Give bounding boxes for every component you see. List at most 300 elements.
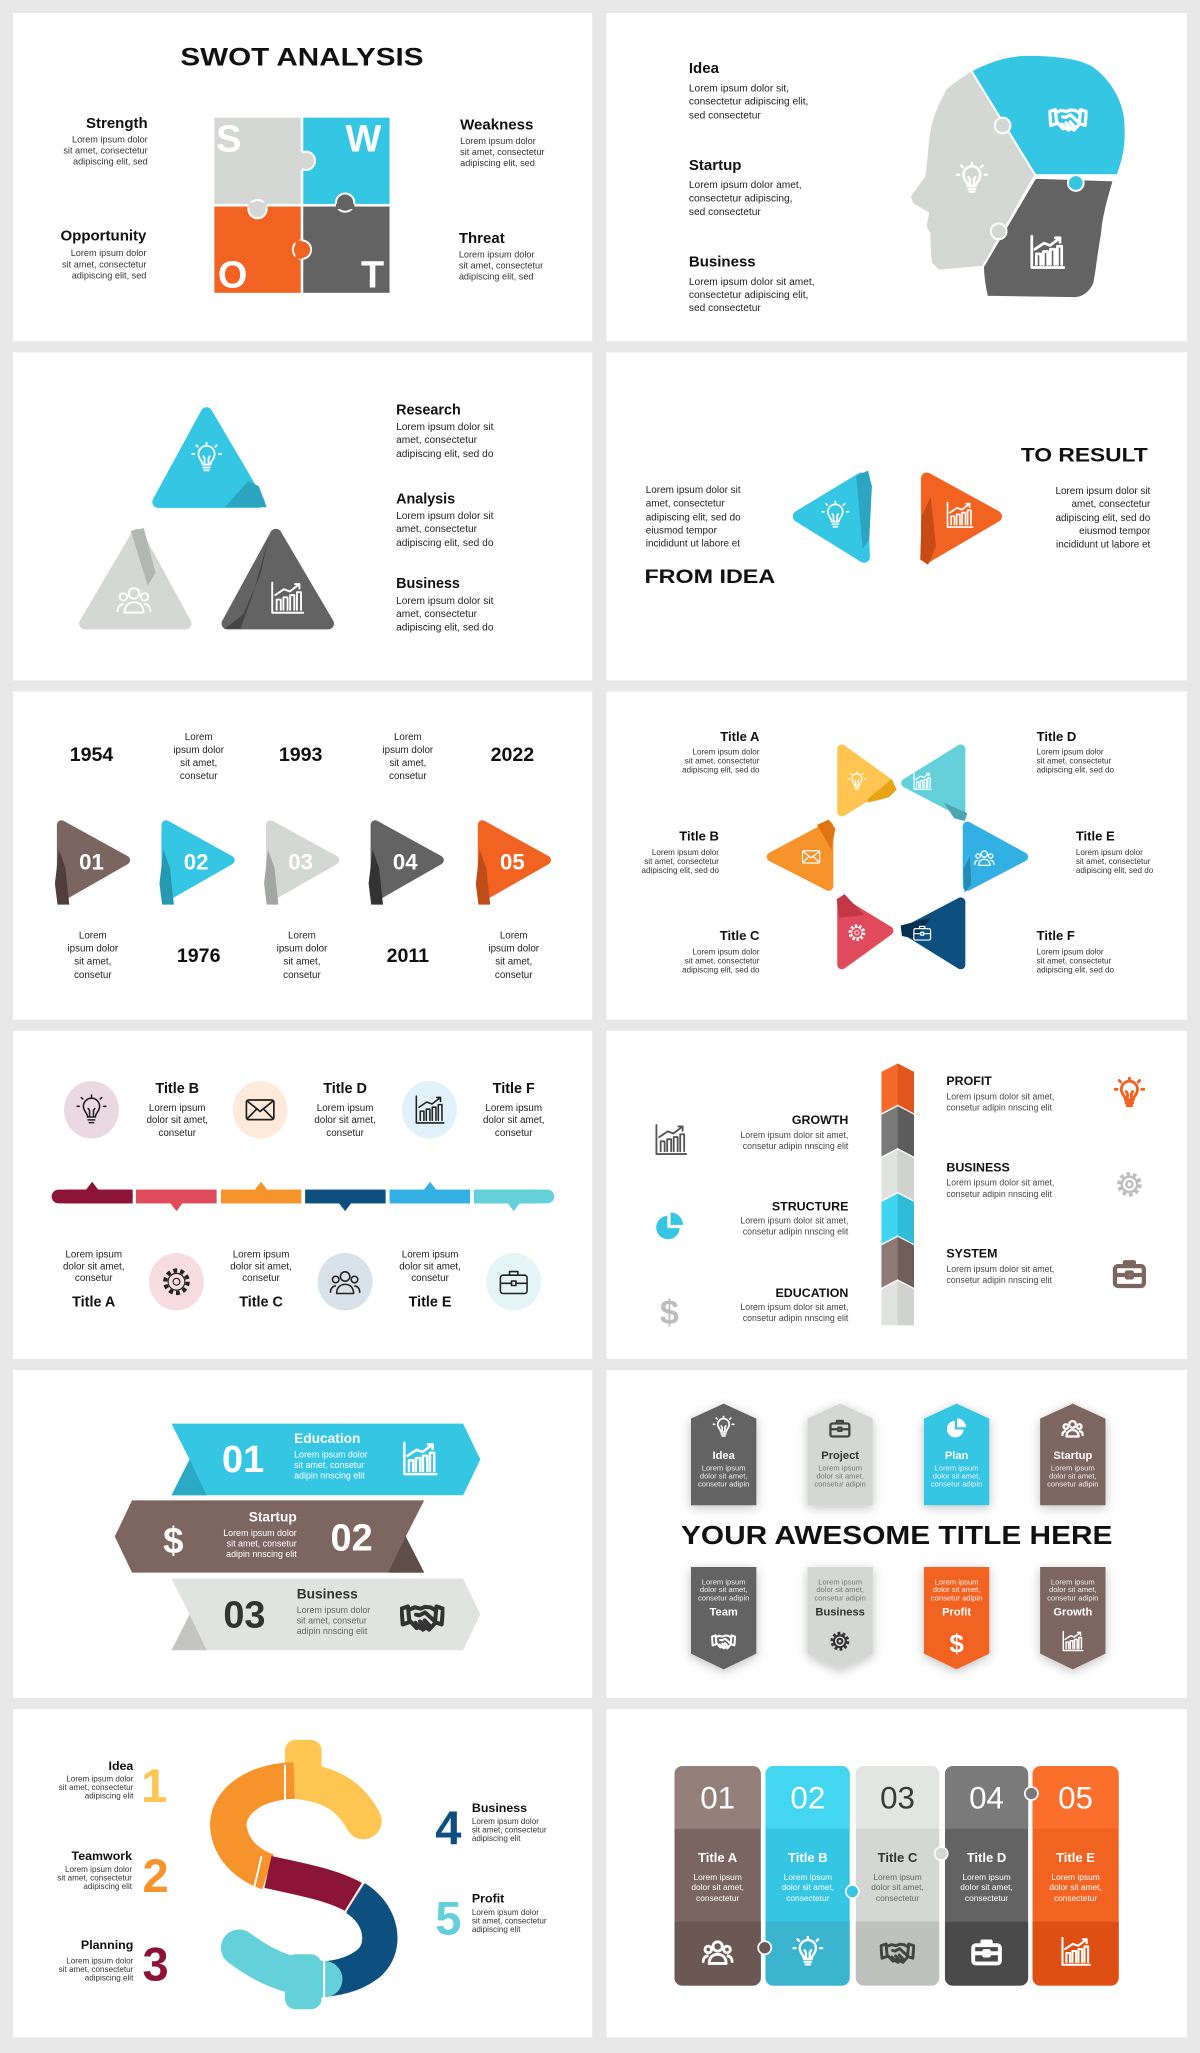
icon circles bottom xyxy=(149,1253,541,1310)
column D xyxy=(945,1766,1028,1986)
text: bottom lorem: sit amet, xyxy=(495,957,532,968)
text: years top xyxy=(70,744,534,766)
banner: Startup: Startup xyxy=(1053,1450,1092,1462)
text: 1 Idea: 1 xyxy=(141,1759,167,1812)
ribbon 01 Education: adipin nnscing elit xyxy=(294,1470,365,1480)
text: 2 Teamwork: Lorem ipsum dolor xyxy=(65,1865,132,1874)
text: 3 Planning: Lorem ipsum dolor xyxy=(66,1956,134,1965)
banner: Business: consetur adipin xyxy=(814,1594,866,1603)
text: top lorem: Lorem xyxy=(185,732,213,743)
text: bottom lorem: sit amet, xyxy=(74,957,111,968)
text: bottom titles: Lorem ipsum xyxy=(402,1250,458,1261)
column E: dolor sit amet, xyxy=(1049,1882,1102,1892)
text: 3 Planning: Planning xyxy=(81,1938,133,1952)
text: Title C xyxy=(682,928,760,975)
text: Title A: sit amet, consectetur xyxy=(685,756,760,765)
text: Idea xyxy=(689,60,808,121)
column B: Lorem ipsum xyxy=(784,1872,832,1882)
column D: consectetur xyxy=(965,1893,1008,1903)
banner: Growth: dolor sit amet, xyxy=(1049,1585,1097,1594)
banner: Growth xyxy=(1040,1567,1105,1669)
banner: Plan: dolor sit amet, xyxy=(933,1471,980,1480)
text: 4 Business: Business xyxy=(472,1801,527,1815)
text: Title C: adipiscing elit, sed do xyxy=(682,966,760,975)
text: 3 Planning xyxy=(59,1937,169,1990)
text: 1 Idea: Lorem ipsum dolor xyxy=(66,1775,134,1784)
shape: triangle A yellow xyxy=(842,749,897,812)
text: 2 Teamwork: 2 xyxy=(142,1849,169,1902)
text: right body: incididunt ut labore et xyxy=(1056,540,1151,551)
text: bottom titles: dolor sit amet, xyxy=(63,1261,124,1272)
text: top lorem: ipsum dolor xyxy=(173,745,225,756)
text: Startup: Lorem ipsum dolor amet, xyxy=(689,180,802,191)
text: top lorem xyxy=(173,732,434,782)
text: Weakness: Lorem ipsum dolor xyxy=(460,136,536,146)
banner: Team xyxy=(691,1567,756,1669)
text: right body: amet, consectetur xyxy=(1071,499,1151,510)
ribbon 01 Education: Education xyxy=(294,1431,360,1446)
text: Analysis: amet, consectetur xyxy=(396,524,478,535)
text: Business xyxy=(689,254,815,314)
banner: Growth: consetur adipin xyxy=(1047,1594,1099,1603)
shape: triangle B orange xyxy=(771,820,835,886)
banner: Profit xyxy=(924,1567,989,1669)
shape: triangle 04: 04 xyxy=(393,849,418,874)
text: top lorem: consetur xyxy=(389,771,427,782)
puzzle: SWOT squares: W xyxy=(346,119,382,161)
shape: triangle D teal xyxy=(906,749,967,821)
ribbon 01 Education: sit amet, consetur xyxy=(294,1460,364,1470)
text: top titles: Lorem ipsum xyxy=(149,1103,206,1114)
text: Analysis xyxy=(396,491,494,549)
column B: consectetur xyxy=(786,1893,830,1903)
text: Title B: Lorem ipsum dolor xyxy=(652,848,719,857)
ribbon 01 Education: 01 xyxy=(222,1439,264,1481)
column B: dolor sit amet, xyxy=(782,1882,834,1892)
text: bottom lorem: consetur xyxy=(283,970,321,981)
text: Startup: sed consectetur xyxy=(689,207,761,218)
text: 1 Idea xyxy=(59,1759,167,1812)
puzzle: SWOT squares: T xyxy=(361,255,384,297)
text: bottom titles xyxy=(63,1250,461,1311)
banner: Profit: consetur adipin xyxy=(931,1594,982,1603)
text: top lorem: Lorem xyxy=(394,732,422,743)
column C: dolor sit amet, xyxy=(871,1882,924,1892)
text: Idea: Idea xyxy=(689,60,720,77)
column C: 03 xyxy=(880,1781,915,1816)
text: right labels: consetur adipin nnscing elit xyxy=(946,1189,1053,1199)
banner: Team: Team xyxy=(710,1607,738,1619)
text: right labels: consetur adipin nnscing elit xyxy=(946,1275,1053,1285)
text: bottom titles: Title C xyxy=(239,1295,283,1311)
text: top titles xyxy=(146,1081,544,1139)
text: Startup xyxy=(689,157,802,218)
text: Title D: Lorem ipsum dolor xyxy=(1037,747,1104,756)
text: Weakness: sit amet, consectetur xyxy=(460,147,544,157)
text: Title F: adipiscing elit, sed do xyxy=(1037,966,1114,975)
text: 5 Profit: Profit xyxy=(472,1892,504,1906)
bar: colored segments xyxy=(52,1182,554,1211)
text: Research: adipiscing elit, sed do xyxy=(396,449,494,460)
title: SWOT ANALYSIS: SWOT ANALYSIS xyxy=(180,44,424,71)
ribbon 02 Startup: $ xyxy=(163,1520,184,1561)
text: years top: 1993 xyxy=(279,744,323,766)
puzzle knobs xyxy=(758,1787,1038,1954)
text: years top: 2022 xyxy=(491,744,534,766)
column A: Title A xyxy=(698,1850,738,1865)
text: Strength: adipiscing elit, sed xyxy=(73,157,148,167)
text: top titles: dolor sit amet, xyxy=(314,1115,376,1126)
icons: right xyxy=(1115,1078,1144,1286)
text: Business: Business xyxy=(396,576,460,592)
banner: Business: Business xyxy=(815,1607,865,1619)
text: Title C: Title C xyxy=(720,928,760,943)
panel: dollar puzzle xyxy=(13,1709,592,2037)
ribbon 03 Business: sit amet, consetur xyxy=(297,1616,367,1626)
text: Title F: Lorem ipsum dolor xyxy=(1037,947,1104,956)
banner: Startup: Lorem ipsum xyxy=(1051,1464,1095,1473)
text: Title A xyxy=(682,729,760,775)
text: Threat: sit amet, consectetur xyxy=(459,261,543,271)
text: left labels: Lorem ipsum dolor sit amet, xyxy=(740,1216,848,1226)
text: 5 Profit: 5 xyxy=(435,1892,461,1945)
text: Strength: Lorem ipsum dolor xyxy=(72,134,148,144)
text: 5 Profit: adipiscing elit xyxy=(472,1925,521,1934)
text: Weakness: adipiscing elit, sed xyxy=(460,158,535,168)
banner: Plan: Lorem ipsum xyxy=(935,1464,979,1473)
text: 2 Teamwork xyxy=(57,1849,169,1902)
column B: Title B xyxy=(788,1850,828,1865)
text: right labels: Lorem ipsum dolor sit amet, xyxy=(946,1091,1054,1101)
text: top lorem: consetur xyxy=(180,771,218,782)
text: Opportunity: adipiscing elit, sed xyxy=(72,270,146,280)
column A: dolor sit amet, xyxy=(691,1882,744,1892)
text: Research xyxy=(396,402,494,460)
text: Strength: Strength xyxy=(86,115,148,132)
banner: Idea: Idea xyxy=(713,1450,736,1462)
banner: Plan xyxy=(924,1404,989,1505)
banner: Idea: dolor sit amet, xyxy=(700,1471,747,1480)
banner: Profit: $ xyxy=(949,1628,964,1658)
text: left labels: consetur adipin nnscing elit xyxy=(743,1141,849,1151)
text: top titles: Lorem ipsum xyxy=(485,1103,542,1114)
text: bottom lorem: Lorem xyxy=(288,931,316,942)
text: bottom titles: Title A xyxy=(72,1295,115,1311)
text: left body: eiusmod tempor xyxy=(646,525,718,536)
ribbon 02 Startup xyxy=(115,1500,424,1573)
column E: Lorem ipsum xyxy=(1051,1872,1100,1882)
text: Threat: adipiscing elit, sed xyxy=(459,272,534,282)
shape: triangle 02: 02 xyxy=(184,849,208,874)
text: Startup: Startup xyxy=(689,157,741,174)
text: Business: Business xyxy=(689,254,756,271)
text: Threat: Threat xyxy=(459,230,505,247)
panel: from idea to result xyxy=(607,352,1187,680)
text: bottom titles: consetur xyxy=(242,1273,281,1284)
column B: 02 xyxy=(790,1781,825,1816)
text: right body: eiusmod tempor xyxy=(1079,526,1151,537)
banner: Growth: Lorem ipsum xyxy=(1051,1577,1095,1586)
banner: Startup: dolor sit amet, xyxy=(1049,1471,1097,1480)
shape: triangle 03 xyxy=(264,825,335,905)
text: Title D: adipiscing elit, sed do xyxy=(1037,766,1114,775)
text: Title F: sit amet, consectetur xyxy=(1037,956,1112,965)
text: bottom lorem: ipsum dolor xyxy=(277,944,328,955)
text: 4 Business: adipiscing elit xyxy=(472,1834,521,1843)
panel: ribbons xyxy=(13,1370,592,1698)
column E: Title E xyxy=(1056,1850,1095,1865)
panel: SWOT analysis xyxy=(13,13,592,341)
banner: Growth: Growth xyxy=(1053,1607,1092,1619)
banner: Idea: consetur adipin xyxy=(698,1479,749,1488)
text: left labels: Lorem ipsum dolor sit amet, xyxy=(740,1302,848,1312)
text: Title A: adipiscing elit, sed do xyxy=(682,766,760,775)
text: years bottom: 1976 xyxy=(177,945,221,967)
ribbon 03 Business xyxy=(172,1579,480,1650)
text: Idea: consectetur adipiscing elit, xyxy=(689,97,808,108)
text: bottom lorem xyxy=(67,931,540,981)
text: Title E: Title E xyxy=(1076,829,1115,844)
text: right body: Lorem ipsum dolor sit xyxy=(1055,486,1151,497)
text: Analysis: Lorem ipsum dolor sit xyxy=(396,511,494,522)
banner: Profit: Profit xyxy=(942,1607,971,1619)
text: years bottom xyxy=(177,945,429,967)
text: left body: amet, consectetur xyxy=(646,499,725,510)
arrow: stacked chevron column xyxy=(881,1064,914,1325)
shape: triangle E blue xyxy=(963,826,1024,893)
banner: Business: Lorem ipsum xyxy=(818,1577,862,1586)
text: Threat: Lorem ipsum dolor xyxy=(459,250,535,260)
ribbon 02 Startup: adipin nnscing elit xyxy=(226,1549,297,1559)
panel: timeline triangles xyxy=(13,692,592,1020)
text: 1 Idea: sit amet, consectetur xyxy=(59,1783,134,1792)
ribbon 02 Startup: sit amet, consetur xyxy=(227,1538,297,1548)
shape: triangle 01: 01 xyxy=(79,849,104,874)
text: 2 Teamwork: adipiscing elit xyxy=(83,1882,133,1891)
icons: left xyxy=(656,1125,686,1332)
text: Business: amet, consectetur xyxy=(396,609,478,620)
shape: dark triangle xyxy=(225,535,328,629)
ribbon 03 Business: Business xyxy=(297,1587,358,1602)
illustration: head puzzle xyxy=(910,55,1126,298)
column A: Lorem ipsum xyxy=(693,1872,742,1882)
text: 3 Planning: sit amet, consectetur xyxy=(59,1965,134,1974)
text: Title E xyxy=(1076,829,1154,875)
text: bottom lorem: Lorem xyxy=(79,931,107,942)
text: 1 Idea: Idea xyxy=(109,1759,133,1773)
panel: five puzzle columns xyxy=(607,1709,1187,2037)
text: 2 Teamwork: Teamwork xyxy=(72,1849,132,1863)
banner: Business xyxy=(807,1567,873,1669)
text: bottom lorem: ipsum dolor xyxy=(488,944,540,955)
text: Title C: Lorem ipsum dolor xyxy=(692,947,760,956)
ribbon 02 Startup: 02 xyxy=(331,1517,373,1559)
banner: Startup xyxy=(1040,1404,1105,1505)
text: Title F: Title F xyxy=(1037,928,1075,943)
text: years top: 1954 xyxy=(70,744,113,766)
shape: triangle 05 xyxy=(476,825,546,905)
icons: left: $ xyxy=(660,1294,679,1332)
text: top titles: dolor sit amet, xyxy=(146,1115,208,1126)
shape: triangle 03: 03 xyxy=(288,849,313,874)
banner: Idea xyxy=(691,1404,756,1505)
shape: triangle 04 xyxy=(369,825,439,905)
column B xyxy=(765,1766,850,1986)
text: right body: adipiscing elit, sed do xyxy=(1055,513,1151,524)
column D: Lorem ipsum xyxy=(962,1872,1011,1882)
banner: Team: Lorem ipsum xyxy=(702,1577,746,1586)
text: right labels: BUSINESS xyxy=(946,1160,1010,1174)
banner: Team: consetur adipin xyxy=(698,1594,749,1603)
text: Business xyxy=(396,576,494,634)
text: Opportunity: sit amet, consectetur xyxy=(62,259,146,269)
column C xyxy=(856,1766,939,1986)
text: Startup: consectetur adipiscing, xyxy=(689,194,793,205)
text: 5 Profit: Lorem ipsum dolor xyxy=(472,1908,539,1917)
ribbon 03 Business: Lorem ipsum dolor xyxy=(297,1605,370,1615)
text: top lorem: sit amet, xyxy=(389,758,426,769)
text: bottom titles: consetur xyxy=(411,1273,450,1284)
text: Analysis: adipiscing elit, sed do xyxy=(396,538,494,549)
heading: TO RESULT: TO RESULT xyxy=(1021,445,1148,466)
text: top titles: consetur xyxy=(495,1128,533,1139)
shape: triangle C red xyxy=(837,894,889,965)
text: top titles: Title D xyxy=(323,1081,367,1097)
panel: vertical arrow column xyxy=(607,1031,1187,1359)
text: top titles: consetur xyxy=(158,1128,197,1139)
text: Title C: sit amet, consectetur xyxy=(685,956,760,965)
text: bottom lorem: consetur xyxy=(495,970,533,981)
text: Analysis: Analysis xyxy=(396,491,455,507)
text: Weakness: Weakness xyxy=(460,116,533,133)
text: Threat xyxy=(459,230,543,282)
text: top titles: Title F xyxy=(493,1081,535,1097)
shape: orange right triangle xyxy=(920,478,996,565)
banner: Plan: Plan xyxy=(945,1450,969,1462)
banner: Project: dolor sit amet, xyxy=(816,1471,864,1480)
text: Business: adipiscing elit, sed do xyxy=(396,623,494,634)
banner: Plan: consetur adipin xyxy=(931,1479,982,1488)
shape: triangle F navy xyxy=(901,902,961,965)
ribbon 02 Startup: Lorem ipsum dolor xyxy=(223,1528,297,1538)
text: top titles: Lorem ipsum xyxy=(317,1103,373,1114)
text: 3 Planning: 3 xyxy=(142,1937,169,1990)
text: Title E: adipiscing elit, sed do xyxy=(1076,866,1154,875)
column E: consectetur xyxy=(1054,1893,1097,1903)
panel: head puzzle xyxy=(607,13,1187,341)
text: Opportunity xyxy=(60,228,147,280)
ribbon 01 Education: Lorem ipsum dolor xyxy=(294,1450,368,1460)
text: Business: Lorem ipsum dolor sit xyxy=(396,596,494,607)
text: years bottom: 2011 xyxy=(387,945,429,967)
text: Weakness xyxy=(460,116,544,168)
text: Business: consectetur adipiscing elit, xyxy=(689,290,808,301)
text: left labels: Lorem ipsum dolor sit amet, xyxy=(740,1130,848,1140)
panel: six triangles circle xyxy=(607,692,1187,1020)
text: Title B xyxy=(642,829,719,875)
icon: chart xyxy=(1032,236,1064,268)
text: right labels: Lorem ipsum dolor sit amet, xyxy=(946,1264,1054,1274)
column D: Title D xyxy=(967,1850,1006,1865)
panel: awesome title banners xyxy=(607,1370,1187,1698)
column C: Title C xyxy=(878,1850,918,1865)
text: Title D xyxy=(1037,729,1114,775)
text: right labels: SYSTEM xyxy=(946,1247,997,1261)
column A: consectetur xyxy=(696,1893,739,1903)
text: bottom lorem: ipsum dolor xyxy=(67,944,119,955)
text: 5 Profit xyxy=(435,1892,547,1945)
text: top titles: Title B xyxy=(155,1081,199,1097)
text: right labels: Lorem ipsum dolor sit amet, xyxy=(946,1178,1054,1188)
text: bottom titles: consetur xyxy=(75,1273,113,1284)
banner: Team: dolor sit amet, xyxy=(700,1585,747,1594)
column A xyxy=(675,1766,761,1986)
banner: Idea: Lorem ipsum xyxy=(702,1464,746,1473)
text: bottom titles: dolor sit amet, xyxy=(230,1261,292,1272)
heading: FROM IDEA: FROM IDEA xyxy=(644,567,776,588)
text: Title F xyxy=(1037,928,1114,975)
text: right labels: PROFIT xyxy=(946,1074,992,1088)
column E xyxy=(1033,1766,1119,1986)
text: bottom titles: Lorem ipsum xyxy=(65,1250,122,1261)
text: Title A: Lorem ipsum dolor xyxy=(692,747,760,756)
shape: blue left triangle xyxy=(799,471,872,557)
text: Business: sed consectetur xyxy=(689,303,761,314)
text: Title A: Title A xyxy=(720,729,760,744)
shape: blue triangle xyxy=(158,413,267,507)
text: 5 Profit: sit amet, consectetur xyxy=(472,1917,547,1926)
panel: horizontal timeline bar xyxy=(13,1031,592,1359)
text: left labels: consetur adipin nnscing elit xyxy=(743,1226,849,1236)
column E: 05 xyxy=(1058,1781,1093,1816)
text: left body: Lorem ipsum dolor sit xyxy=(646,485,741,496)
text: Idea: Lorem ipsum dolor sit, xyxy=(689,84,789,95)
shape: triangle 01 xyxy=(55,825,125,905)
text: Strength xyxy=(63,115,148,167)
column D: 04 xyxy=(969,1781,1004,1816)
ribbon 02 Startup: Startup xyxy=(249,1510,297,1525)
text: 4 Business: sit amet, consectetur xyxy=(472,1826,547,1835)
text: right labels xyxy=(946,1074,1054,1285)
text: left body xyxy=(646,485,741,549)
puzzle: SWOT squares: S xyxy=(216,119,241,161)
text: left labels: consetur adipin nnscing elit xyxy=(743,1313,849,1323)
text: bottom lorem: Lorem xyxy=(500,931,528,942)
text: bottom titles: Title E xyxy=(409,1295,452,1311)
shape: grey triangle xyxy=(85,528,186,624)
text: 4 Business xyxy=(435,1801,547,1854)
text: Title D: Title D xyxy=(1037,729,1076,744)
text: 4 Business: 4 xyxy=(435,1801,461,1854)
text: left body: adipiscing elit, sed do xyxy=(646,512,741,523)
banner: Business: dolor sit amet, xyxy=(816,1585,864,1594)
text: left body: incididunt ut labore et xyxy=(646,538,740,549)
puzzle: SWOT squares: O xyxy=(218,255,247,297)
banner: Project: Lorem ipsum xyxy=(818,1464,862,1473)
text: Title B: sit amet, consectetur xyxy=(644,857,719,866)
text: bottom lorem: sit amet, xyxy=(283,957,320,968)
ribbon 01 Education xyxy=(172,1424,480,1495)
text: right labels: consetur adipin nnscing elit xyxy=(946,1102,1053,1112)
text: bottom titles: dolor sit amet, xyxy=(399,1261,461,1272)
text: Title B: Title B xyxy=(679,829,719,844)
column C: Lorem ipsum xyxy=(873,1872,922,1882)
text: left labels xyxy=(740,1113,849,1323)
text: Opportunity: Lorem ipsum dolor xyxy=(71,248,146,258)
puzzle: SWOT squares xyxy=(214,118,390,297)
text: Title D: sit amet, consectetur xyxy=(1037,756,1112,765)
text: Opportunity: Opportunity xyxy=(60,228,147,245)
